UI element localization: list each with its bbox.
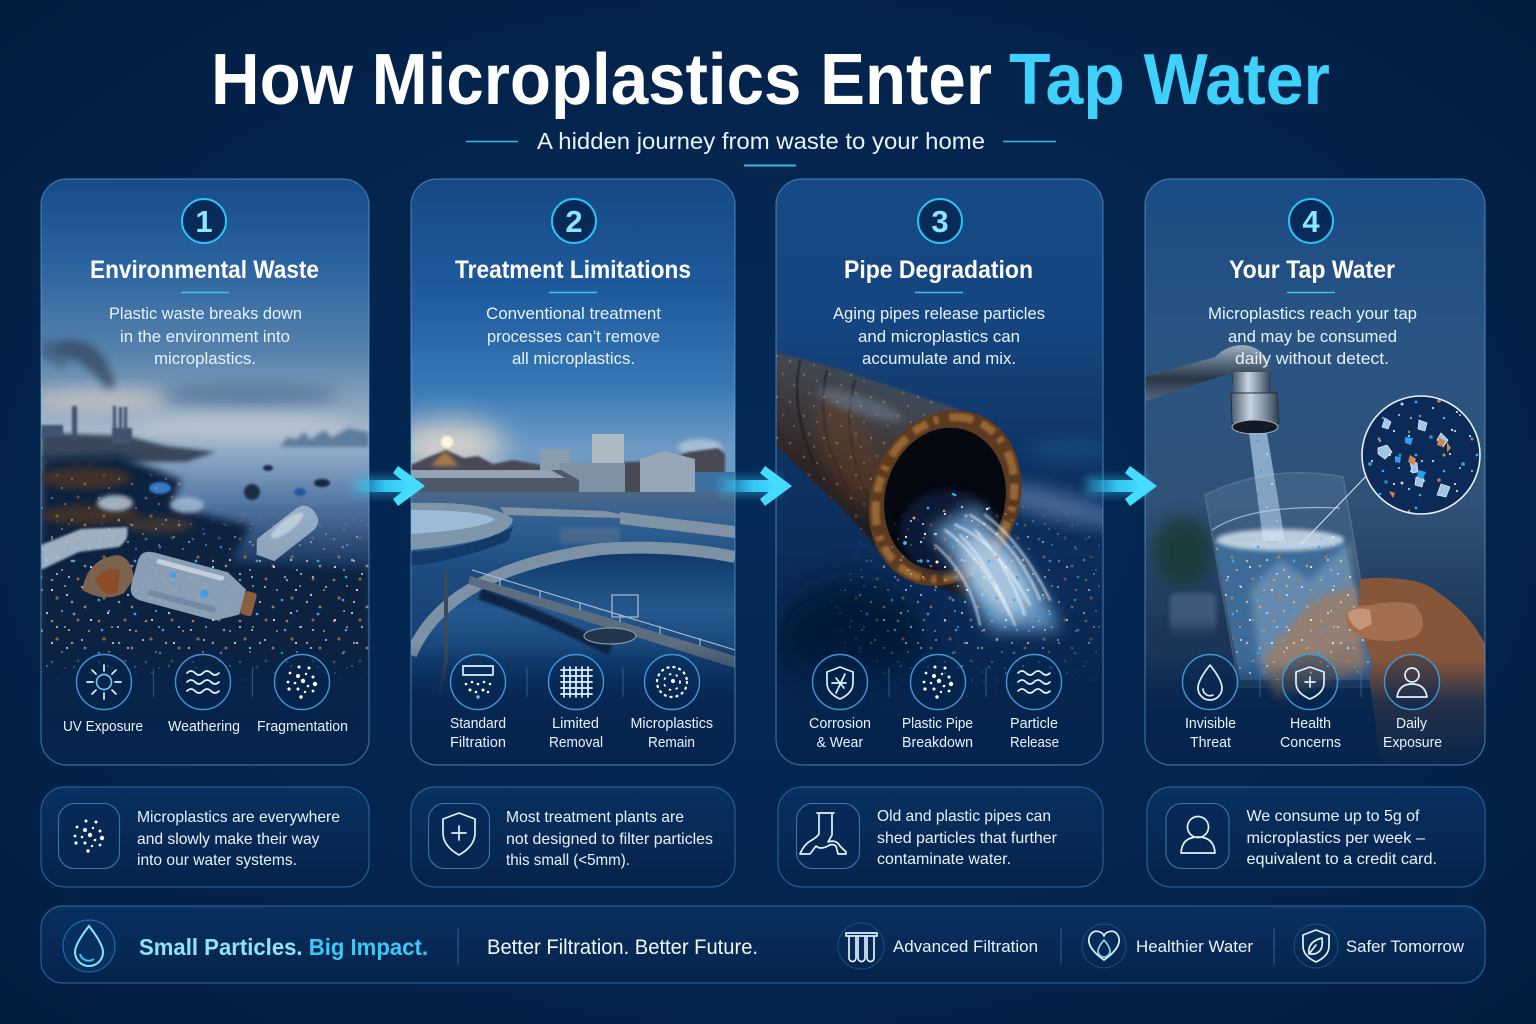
step number 4 (1289, 199, 1333, 243)
label: Daily (1396, 715, 1427, 732)
step number 3: 3 (931, 204, 949, 239)
label: Corrosion (809, 715, 871, 732)
description: Plastic waste breaks down (109, 304, 302, 323)
icon: test tubes (838, 923, 884, 969)
description: accumulate and mix. (862, 349, 1016, 368)
label (630, 715, 713, 751)
callout: 5g per week: microplastics per week – (1246, 830, 1425, 847)
description (486, 304, 661, 368)
scene: corroded pipe (776, 179, 1103, 701)
callout: pipes shed particles: shed particles that further (877, 830, 1058, 847)
callout: treatment plants (411, 787, 735, 887)
tagline: Small Particles. Big Impact. (139, 934, 428, 960)
scene: polluted shoreline (41, 179, 369, 683)
label: Filtration (450, 734, 506, 751)
label: Limited (552, 715, 599, 732)
icon: microplastics remain (644, 654, 700, 710)
step number 1: 1 (195, 204, 213, 239)
label: Advanced Filtration (893, 937, 1038, 956)
label: Microplastics (630, 715, 713, 732)
label (1010, 715, 1059, 751)
heading: Treatment Limitations (455, 256, 691, 284)
step number 1 (182, 199, 226, 243)
description: Conventional treatment (486, 304, 661, 323)
icon: heart with drop (1082, 924, 1126, 968)
label: Standard (450, 715, 506, 732)
callout: 5g per week: We consume up to 5g of (1246, 808, 1420, 825)
callout: pipes shed particles: contaminate water. (877, 851, 1011, 868)
heading: Environmental Waste (90, 256, 319, 284)
label (450, 715, 506, 751)
icon: water drop (63, 920, 115, 972)
panel: your tap water (1145, 179, 1485, 765)
label: UV Exposure (63, 718, 143, 735)
icon: corrosion and wear (812, 654, 868, 710)
label: Removal (549, 734, 603, 751)
icon: plastic pipe breakdown (910, 654, 966, 710)
icon: UV exposure (76, 654, 132, 710)
card outline (1145, 179, 1485, 765)
icon: particle release (1006, 654, 1062, 710)
step number 3 (918, 199, 962, 243)
description: processes can’t remove (487, 327, 660, 346)
callout: pipes shed particles: Old and plastic pipes can (877, 808, 1051, 825)
step number 4: 4 (1302, 204, 1320, 239)
icon: health concerns (1282, 654, 1338, 710)
icon: shield leaf (1294, 924, 1338, 968)
magnified particles (1360, 395, 1482, 515)
callout: treatment plants: not designed to filter particles (506, 831, 713, 848)
bottom banner (41, 906, 1485, 983)
callout: 5g per week (1147, 787, 1485, 887)
scene: treatment plant (411, 179, 735, 692)
label: Weathering (168, 718, 240, 735)
description (1208, 304, 1417, 368)
scene: faucet and glass (1145, 179, 1485, 765)
card outline (41, 179, 369, 765)
heading: Pipe Degradation (844, 256, 1033, 284)
label (1185, 715, 1236, 751)
subtitle: A hidden journey from waste to your home (537, 128, 985, 154)
arrow: step 1 to 2 (352, 466, 425, 506)
label (902, 715, 973, 751)
icon: invisible threat (1182, 654, 1238, 710)
description (833, 304, 1045, 368)
callout: treatment plants: this small (<5mm). (506, 852, 630, 869)
label: Fragmentation (257, 718, 348, 735)
label (1383, 715, 1442, 751)
description: and may be consumed (1228, 327, 1397, 346)
label: Breakdown (902, 734, 973, 751)
callout: microplastics everywhere (41, 787, 369, 887)
description: daily without detect. (1235, 349, 1389, 368)
label: & Wear (816, 734, 863, 751)
description: all microplastics. (512, 349, 635, 368)
callout: treatment plants: Most treatment plants are (506, 809, 684, 826)
label: Safer Tomorrow (1346, 937, 1465, 956)
card outline (776, 179, 1103, 765)
arrow: step 3 to 4 (1085, 466, 1157, 506)
description (109, 304, 302, 368)
description: and microplastics can (858, 327, 1020, 346)
label: Invisible (1185, 715, 1236, 732)
label (549, 715, 603, 751)
callout: microplastics everywhere: into our water systems. (137, 852, 297, 869)
panel: treatment limitations (395, 179, 735, 765)
description: Microplastics reach your tap (1208, 304, 1417, 323)
label: Healthier Water (1136, 937, 1253, 956)
label: Particle (1010, 715, 1058, 732)
slogan: Better Filtration. Better Future. (487, 936, 758, 959)
label: Threat (1190, 734, 1232, 751)
heading: Your Tap Water (1229, 256, 1395, 284)
label (809, 715, 871, 751)
step number 2: 2 (565, 204, 583, 239)
label (1280, 715, 1341, 751)
label: Health (1290, 715, 1331, 732)
label: Concerns (1280, 734, 1341, 751)
icon: fragmentation (274, 654, 330, 710)
icon: daily exposure (1384, 654, 1440, 710)
label: Remain (648, 734, 695, 751)
icon: weathering (176, 654, 230, 710)
title: Tap Water (1009, 40, 1330, 120)
label: Plastic Pipe (902, 715, 973, 732)
callout: microplastics everywhere: Microplastics are everywhere (137, 809, 340, 826)
callout: pipes shed particles (778, 787, 1103, 887)
description: Aging pipes release particles (833, 304, 1045, 323)
callout: microplastics everywhere: and slowly make their way (137, 831, 320, 848)
title: How Microplastics Enter (211, 40, 992, 120)
description: in the environment into (120, 327, 290, 346)
label: Exposure (1383, 734, 1442, 751)
description: microplastics. (154, 349, 256, 368)
card outline (411, 179, 735, 765)
panel: environmental waste (30, 179, 369, 765)
arrow: step 2 to 3 (719, 466, 792, 506)
label: Release (1010, 734, 1059, 751)
panel: pipe degradation (775, 179, 1126, 765)
callout: 5g per week: equivalent to a credit card. (1246, 851, 1437, 868)
step number 2 (552, 199, 596, 243)
icon: limited removal (548, 654, 604, 710)
icon: standard filtration (450, 654, 506, 710)
